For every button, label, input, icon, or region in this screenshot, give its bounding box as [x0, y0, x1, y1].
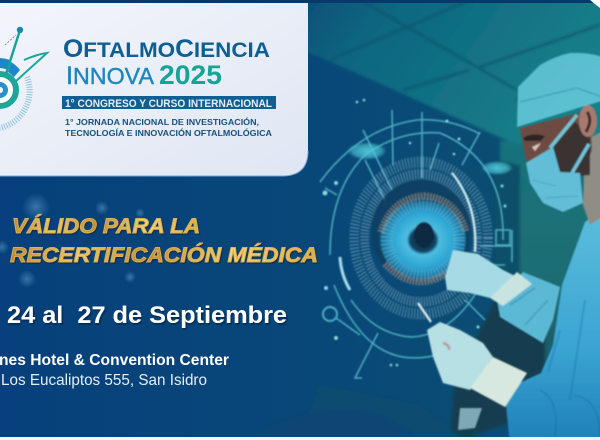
holographic eye — [320, 99, 513, 378]
subtitle: 1° JORNADA NACIONAL DE INVESTIGACIÓN, — [65, 116, 259, 127]
icon: eye logo — [0, 27, 47, 128]
heading: recertification — [10, 213, 318, 267]
surgical mask — [526, 147, 583, 212]
scalpel — [418, 303, 431, 322]
gown — [506, 200, 600, 440]
title: OftalmoCiencia: OFTALMOCIENCIA — [63, 35, 270, 63]
lower glove — [427, 322, 493, 390]
neck — [583, 130, 600, 225]
pupil — [414, 222, 434, 248]
date: 24 al 27 de Septiembre — [7, 302, 287, 329]
cap — [517, 53, 600, 127]
glow ellipses — [347, 142, 387, 160]
banner: congreso: 1° CONGRESO Y CURSO INTERNACIONAL — [65, 98, 272, 110]
iris — [380, 201, 466, 279]
dotted disc — [354, 162, 488, 314]
venue: Los Eucaliptos 555, San Isidro — [1, 372, 207, 389]
surgeon — [418, 53, 600, 440]
shoe — [458, 408, 482, 430]
subtitle: TECNOLOGÍA E INNOVACIÓN OFTALMOLÓGICA — [65, 127, 272, 138]
title: Innova 2025 — [66, 60, 222, 90]
upper glove — [445, 250, 517, 298]
title: Innova 2025: INNOVA — [66, 62, 155, 90]
subtitle — [65, 116, 272, 138]
face — [520, 110, 592, 176]
bottom white strip — [0, 437, 600, 440]
venue — [0, 352, 229, 389]
venue: nes Hotel & Convention Center — [0, 352, 229, 369]
title: Innova 2025: 2025 — [159, 60, 222, 90]
upper sleeve — [497, 272, 560, 343]
glowing nodes — [322, 99, 506, 366]
panel: logo card — [0, 3, 308, 176]
ear — [579, 105, 597, 137]
heading: recertification: RECERTIFICACIÓN MÉDICA — [10, 242, 318, 267]
circuit rings — [320, 110, 512, 378]
heading: recertification: VÁLIDO PARA LA — [12, 213, 200, 238]
